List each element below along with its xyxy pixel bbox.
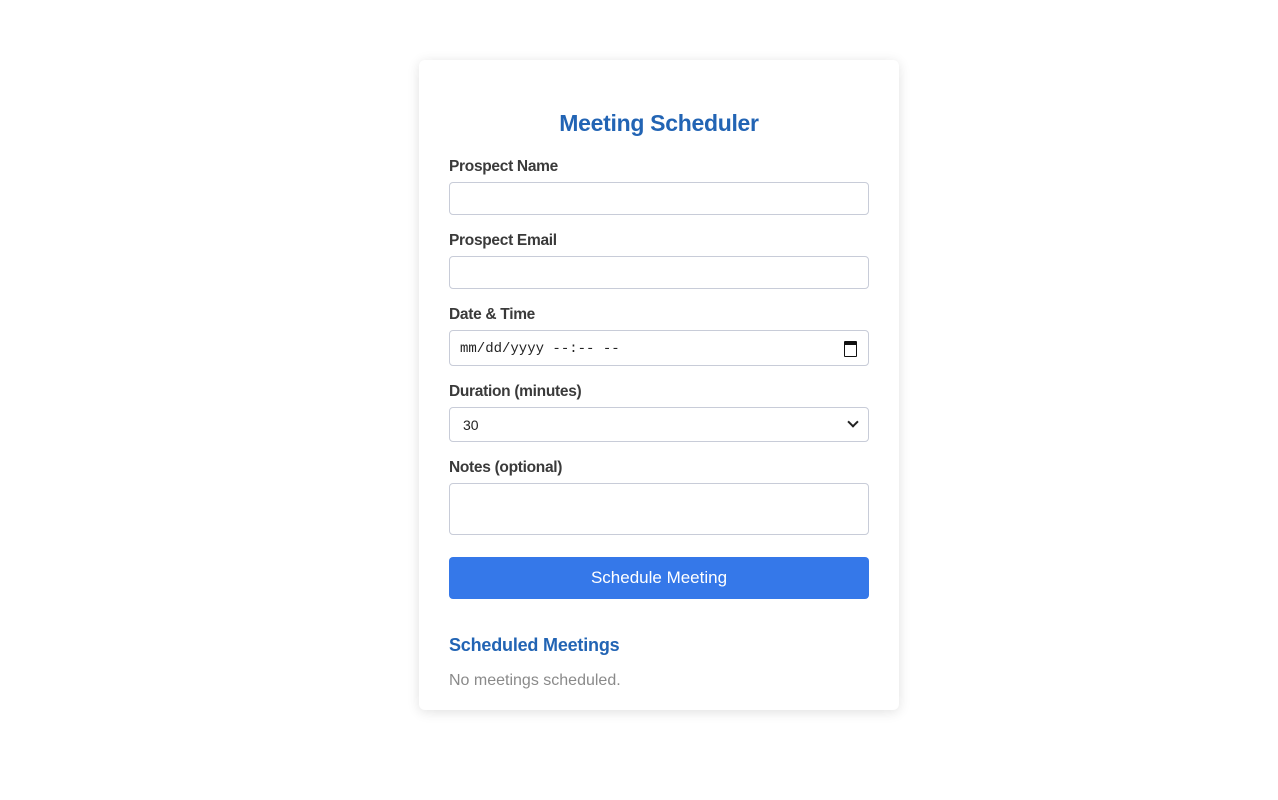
input: prospect email xyxy=(449,256,869,289)
select: duration: 30 xyxy=(463,417,479,433)
select: duration xyxy=(449,407,869,442)
text: empty state: No meetings scheduled. xyxy=(449,672,621,689)
input: prospect name xyxy=(449,182,869,215)
title: Meeting Scheduler xyxy=(559,110,759,136)
label: duration: Duration (minutes) xyxy=(449,383,581,400)
panel: form card xyxy=(419,60,899,710)
label: notes: Notes (optional) xyxy=(449,459,562,476)
label: prospect email: Prospect Email xyxy=(449,232,557,249)
heading: scheduled meetings: Scheduled Meetings xyxy=(449,635,619,655)
button: schedule meeting xyxy=(449,557,869,599)
label: date time: Date & Time xyxy=(449,306,535,323)
input: date time: mm/dd/yyyy --:-- -- xyxy=(460,341,620,357)
label: prospect name: Prospect Name xyxy=(449,158,558,175)
button: schedule meeting: Schedule Meeting xyxy=(591,568,727,587)
textarea: notes xyxy=(449,483,869,535)
input: date time xyxy=(449,330,869,366)
